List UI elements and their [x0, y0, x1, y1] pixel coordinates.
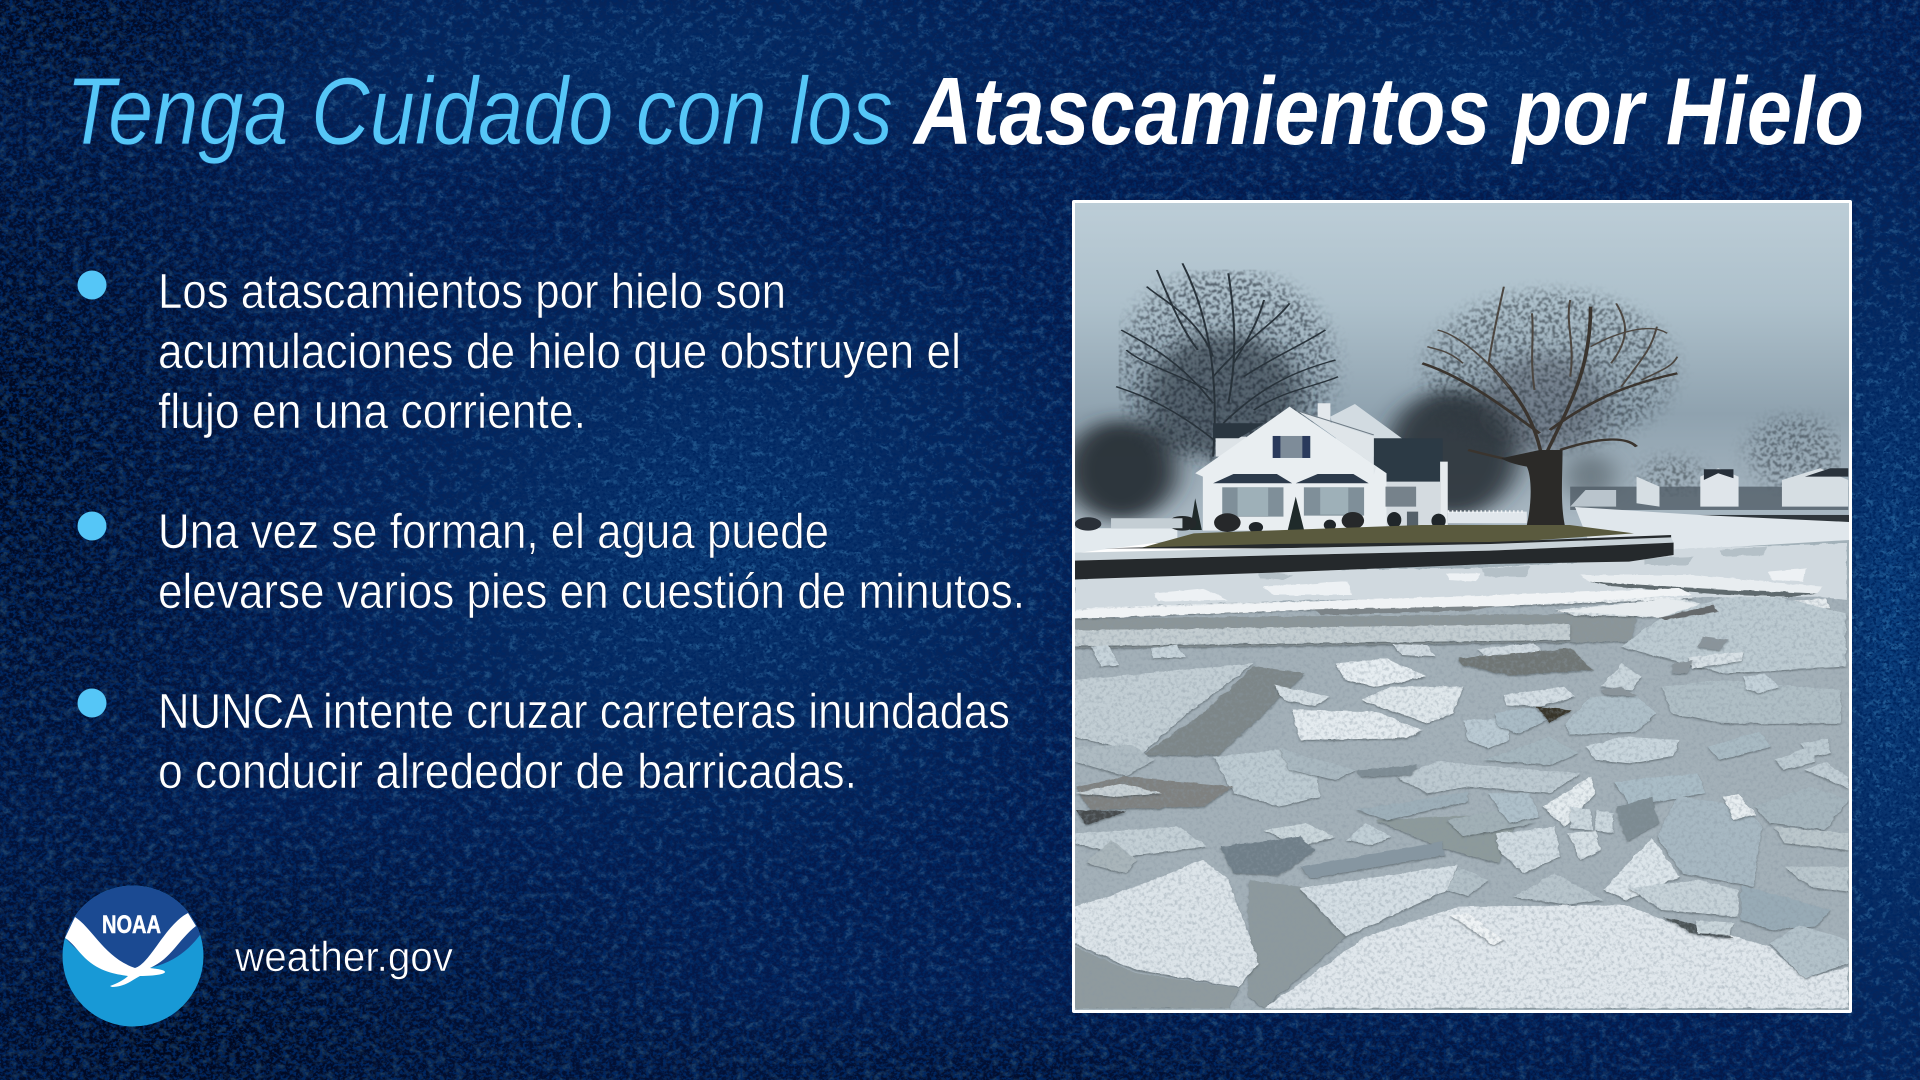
bullet item 1: [78, 265, 961, 439]
NOAA logo: [62, 886, 204, 1026]
website label: weather.gov: [234, 933, 453, 980]
photo: ice jam beside white house: [1065, 200, 1852, 1013]
trunk of large tree: [1501, 450, 1565, 527]
bullet item 2: [78, 505, 1025, 619]
bullet item 1: acumulaciones de hielo que obstruyen el: [158, 325, 961, 379]
lawn: [1139, 525, 1634, 548]
bullet item 2: Una vez se forman, el agua puede: [158, 505, 829, 559]
frozen river far reach: [1575, 507, 1849, 550]
bullet item 1: flujo en una corriente.: [158, 385, 586, 439]
bullet item 1: Los atascamientos por hielo son: [158, 265, 786, 319]
NOAA wordmark: NOAA: [102, 911, 161, 939]
title: light part: Tenga Cuidado con los: [66, 58, 893, 165]
seawall top: [1075, 537, 1674, 561]
snow on far bank: [1074, 528, 1177, 553]
ice grain: [1075, 560, 1849, 1010]
sky: [1075, 203, 1849, 543]
icon: white bird wing: [65, 913, 196, 987]
bullet list: [78, 265, 1025, 799]
trees and house scene: [1065, 263, 1851, 553]
bullet item 3: o conducir alrededor de barricadas.: [158, 745, 857, 799]
ice floes foreground: [1074, 580, 1848, 1008]
river ice base: [1075, 540, 1849, 1010]
seawall face: [1075, 543, 1674, 579]
far ice rubble and strips: [1075, 543, 1847, 620]
white picket fence: [1111, 518, 1182, 528]
white house: [1075, 403, 1448, 533]
bullet item 3: [78, 685, 1010, 799]
bullet item 2: elevarse varios pies en cuestión de minutos.: [158, 565, 1025, 619]
title: [66, 58, 1864, 165]
distant houses: [1570, 468, 1849, 522]
lawn, seawall and bank: [1075, 525, 1674, 579]
bullet item 3: NUNCA intente cruzar carreteras inundadas: [158, 685, 1010, 739]
